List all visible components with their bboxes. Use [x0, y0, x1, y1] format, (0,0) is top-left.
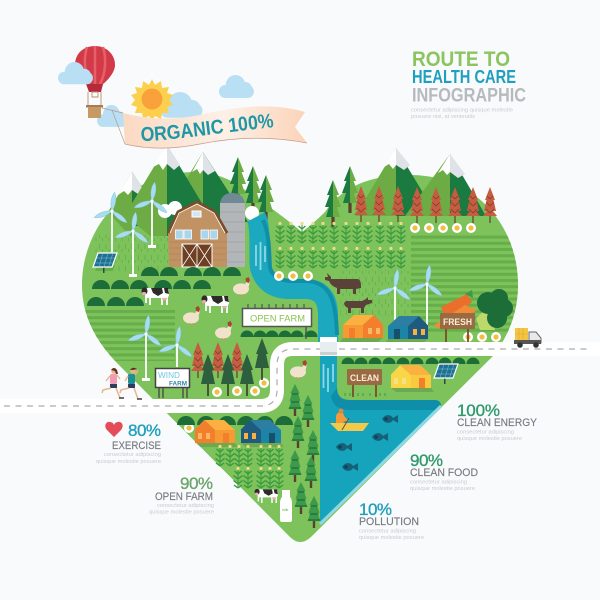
- open farm sign: [242, 304, 312, 339]
- road: [0, 349, 600, 406]
- white clouds by barn: [158, 201, 259, 220]
- icon: cloud behind sun: [160, 92, 202, 118]
- grass patch by barn: [95, 235, 170, 271]
- grass patch by cows: [340, 270, 410, 316]
- striped field right: [411, 233, 519, 333]
- trees left: [230, 157, 274, 222]
- stat: open farm: [149, 474, 214, 516]
- stat: clean energy: [457, 401, 538, 442]
- trees by the road: [191, 338, 269, 396]
- crops top rows: [276, 222, 406, 268]
- stat: pollution: POLLUTION: [359, 516, 419, 528]
- left mountains: [108, 145, 248, 236]
- houses above the road: [340, 315, 428, 343]
- wind turbines near barn: [93, 182, 168, 277]
- truck: [514, 328, 541, 348]
- icon: heart: [105, 422, 123, 437]
- solar panel right: [434, 364, 458, 384]
- icon: cloud behind balloon: [97, 105, 128, 127]
- stat: pollution: 10%: [359, 500, 392, 519]
- title block: INFOGRAPHIC: [412, 86, 526, 106]
- stat: clean food: 90%: [410, 451, 443, 470]
- right mountains: [355, 148, 486, 216]
- houses below road: [194, 420, 284, 447]
- solar panel left: [93, 253, 117, 273]
- wind turbines right: [376, 265, 443, 330]
- flowers: [184, 223, 501, 433]
- icon: hot air balloon: [75, 46, 115, 118]
- stat: open farm: OPEN FARM: [155, 491, 213, 503]
- wind farm sign: [156, 368, 190, 398]
- barn: [168, 202, 227, 267]
- dam bridge: [320, 337, 337, 355]
- yellow house: [390, 365, 434, 392]
- runners: [102, 368, 142, 399]
- trees right green: [325, 166, 358, 227]
- stat: clean energy: CLEAN ENERGY: [457, 417, 538, 429]
- milk bottle: [280, 490, 292, 522]
- stat: open farm: consectetur adipiscing: [157, 503, 214, 509]
- small bushes under sign: [240, 330, 318, 337]
- stat: exercise: [96, 421, 161, 465]
- river: [256, 217, 337, 345]
- title block: ROUTE TO: [412, 48, 510, 71]
- icon: cloud upper right: [219, 75, 254, 98]
- barn silo: [220, 193, 245, 267]
- stat: pollution: quisque molestie posuere: [359, 535, 424, 541]
- heart base shape: [82, 172, 518, 542]
- cows and chickens on pasture: [142, 277, 307, 380]
- milk bottle: milk: [282, 508, 288, 512]
- stat: pollution: consectetur adipiscing: [359, 528, 416, 534]
- boat with rower: [330, 408, 369, 431]
- pine trees along river: [288, 384, 320, 528]
- stat: exercise: EXERCISE: [112, 440, 161, 452]
- red trees row: [354, 186, 497, 223]
- stat: open farm: quisque molestie posuere: [149, 510, 214, 516]
- stat: clean food: quisque molestie posuere: [410, 486, 475, 492]
- stat: pollution: [359, 500, 424, 541]
- striped field left: [85, 309, 175, 361]
- lake and river below road: [320, 356, 441, 524]
- runner man: [120, 368, 142, 399]
- bushes under road right: [342, 358, 480, 364]
- title block: HEALTH CARE: [412, 67, 516, 87]
- dark cattle: [325, 273, 372, 313]
- fresh sign: FRESH: [443, 317, 472, 328]
- stat: clean energy: quisque molestie posuere: [457, 436, 522, 442]
- stat: exercise: quisque molestie posuere: [96, 459, 161, 465]
- stat: clean energy: 100%: [457, 401, 500, 420]
- banner text: ORGANIC 100%: [141, 114, 274, 142]
- crops bottom rows: [216, 445, 284, 488]
- wind turbines by road: [127, 315, 193, 381]
- banner: [102, 106, 307, 148]
- open farm sign: OPEN FARM: [250, 314, 305, 324]
- stat: clean energy: consectetur adipiscing: [457, 430, 514, 436]
- runner woman: [102, 368, 124, 398]
- stat: exercise: 80%: [128, 421, 161, 440]
- clean sign: CLEAN: [350, 373, 379, 384]
- title block: posuere nisi, at venenatis: [411, 114, 475, 120]
- icon: cloud over balloon: [58, 62, 93, 84]
- stat: clean food: [410, 451, 478, 492]
- bushes: [87, 267, 241, 306]
- fresh sign: [440, 313, 475, 342]
- wind farm sign: FARM: [169, 380, 187, 388]
- title block: consectetur adipiscing quisque molestie: [411, 108, 513, 114]
- stat: open farm: 90%: [180, 474, 213, 493]
- stat: exercise: consectetur adipiscing: [104, 452, 161, 458]
- wind farm sign: WIND: [158, 370, 180, 380]
- clean sign: [345, 369, 385, 397]
- icon: sun: [131, 79, 173, 121]
- title block: [411, 48, 526, 120]
- bushes below road left: [177, 416, 293, 425]
- cow near bottom: [255, 489, 278, 503]
- stat: clean food: consectetur adipiscing: [410, 480, 467, 486]
- stat: clean food: CLEAN FOOD: [410, 467, 478, 479]
- fish: [336, 415, 398, 471]
- vegetables: carrots and broccoli: [433, 289, 513, 330]
